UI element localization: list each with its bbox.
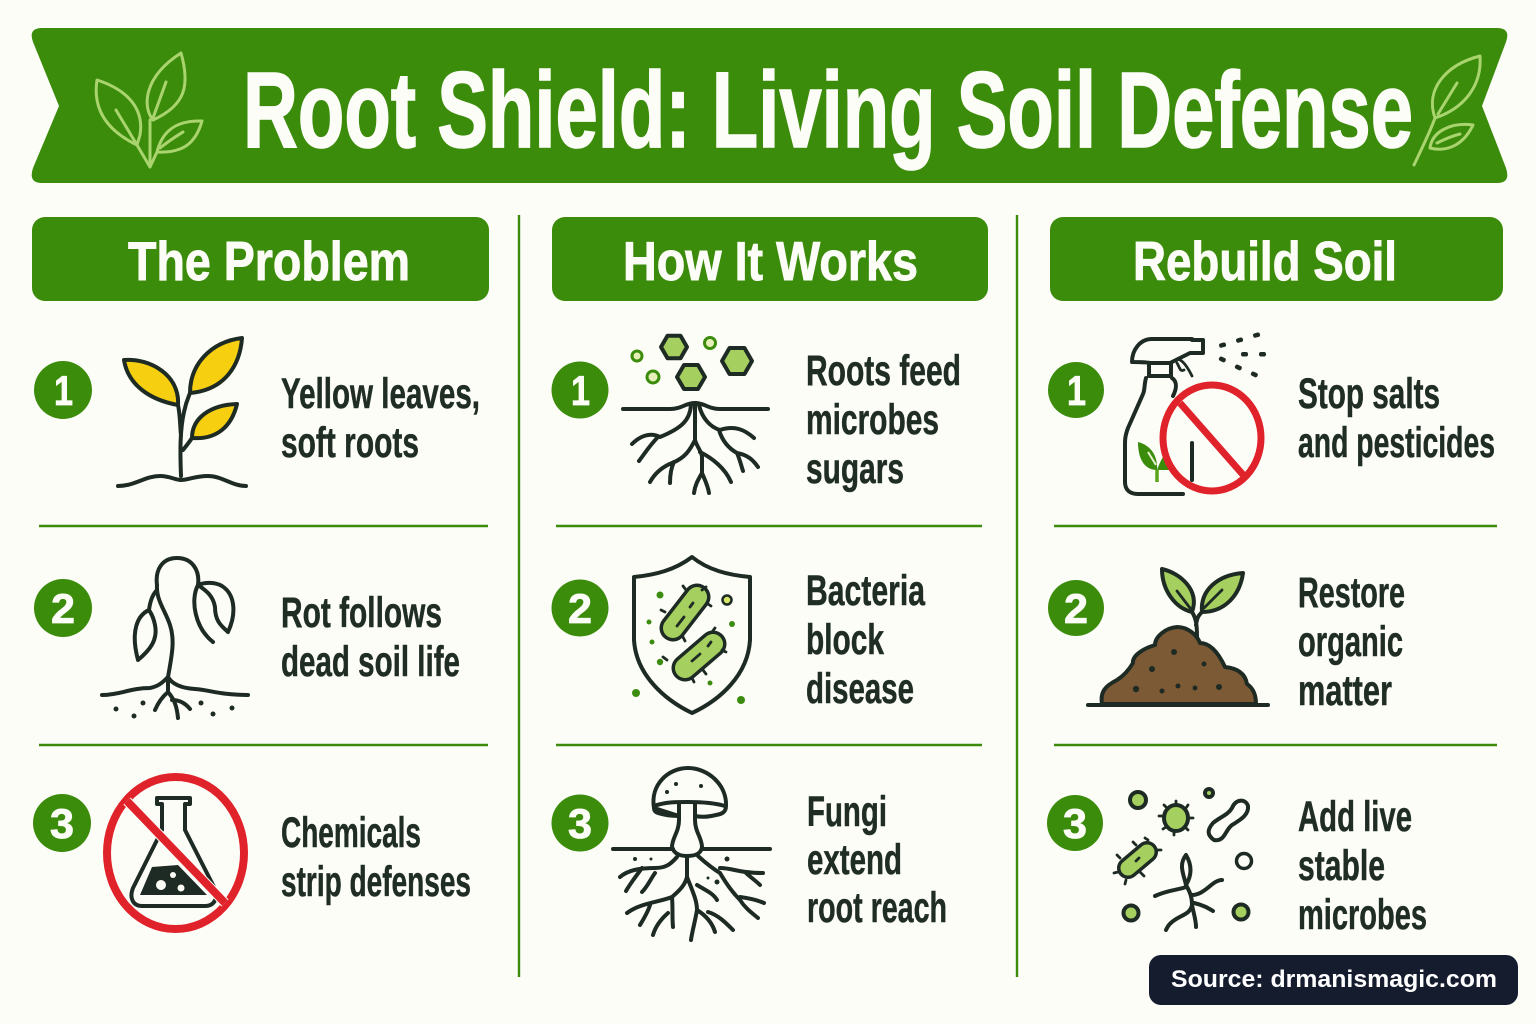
item 3: microbes: microbes [1298,891,1427,939]
item 3: fungi: root reach [807,884,947,932]
icon: left leaves [96,53,202,167]
item 2: bacteria: block [806,616,884,664]
item 3: chemicals [33,777,471,929]
item 3: chemicals: strip defenses [281,858,471,906]
item 2: restore: 2 [1064,585,1088,632]
panel: The Problem [32,217,489,929]
item 1: stop salts: Stop salts [1298,370,1440,418]
heading: The Problem [32,217,489,301]
item 1: roots feed [552,336,961,493]
item 3: fungi: extend [807,836,902,884]
heading: Rebuild Soil [1050,217,1503,301]
icon: right leaves [1414,56,1480,165]
item 2: bacteria: 2 [568,585,592,632]
item 2: rot: 2 [51,585,75,632]
item 1: roots feed: sugars [806,445,904,493]
item 3: fungi [552,768,947,940]
item 1: yellow leaves: 1 [54,367,73,414]
panel: How It Works [552,217,988,940]
item 2: bacteria: Bacteria [806,567,926,615]
item 2: bacteria [552,557,926,713]
item 2: restore: organic [1298,618,1403,666]
item 3: chemicals: Chemicals [281,809,421,857]
item 3: microbes: 3 [1063,800,1087,847]
item 2: rot [34,558,460,718]
item 1: roots feed: Roots feed [806,347,961,395]
title banner [32,28,1507,183]
item 3: chemicals: 3 [50,800,74,847]
item 2: restore: matter [1298,667,1392,715]
item 1: roots feed: 1 [571,367,590,414]
item 3: fungi: Fungi [807,788,887,836]
item 1: yellow leaves [34,338,480,486]
item 3: microbes: Add live [1298,793,1412,841]
item 1: yellow leaves: soft roots [281,419,419,467]
item 2: bacteria: disease [806,665,914,713]
heading: Rebuild Soil: Rebuild Soil [1133,230,1397,292]
divider lines [39,215,1497,977]
item 2: restore [1048,569,1405,715]
panel: Rebuild Soil [1047,217,1503,939]
item 3: microbes: stable [1298,842,1385,890]
source badge: Source: drmanismagic.com [1171,966,1497,993]
item 2: rot: dead soil life [281,638,460,686]
item 2: rot: Rot follows [281,589,442,637]
item 3: fungi: 3 [568,800,592,847]
item 3: microbes [1047,789,1427,939]
item 1: roots feed: microbes [806,396,939,444]
heading: How It Works: How It Works [623,230,918,292]
heading: How It Works [552,217,988,301]
item 1: yellow leaves: Yellow leaves, [281,370,480,418]
heading: The Problem: The Problem [128,230,410,292]
item 2: restore: Restore [1298,569,1405,617]
item 1: stop salts: 1 [1067,367,1086,414]
item 1: stop salts [1048,332,1495,494]
source badge [1149,955,1518,1005]
